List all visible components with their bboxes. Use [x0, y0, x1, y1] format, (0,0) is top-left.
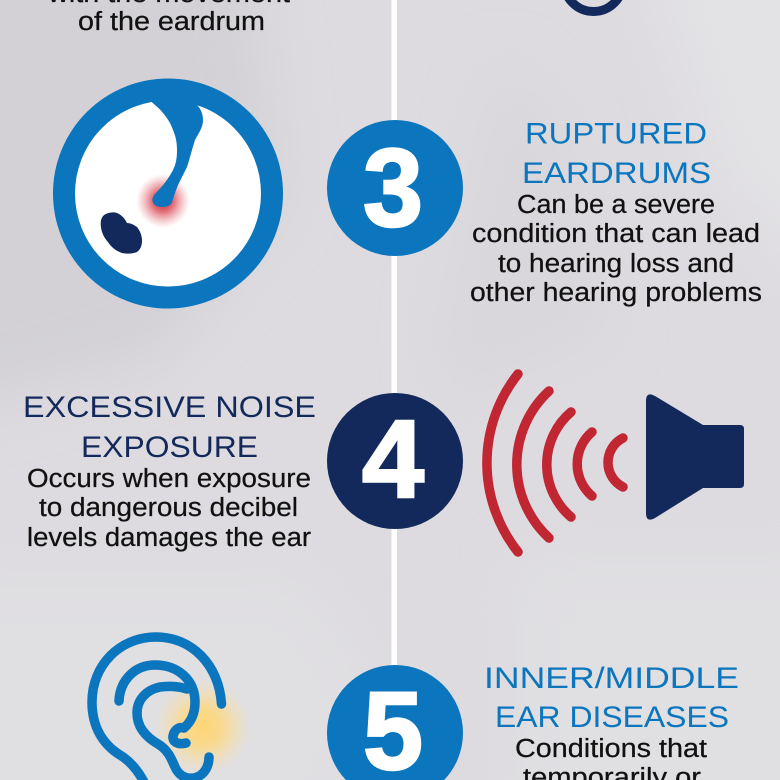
heading: inner/middle ear diseases [484, 662, 739, 734]
heading: ruptured eardrums: RUPTURED [525, 118, 707, 150]
text block: excessive noise exposure: levels damages the ear [27, 524, 312, 552]
heading: inner/middle ear diseases: INNER/MIDDLE [484, 662, 739, 695]
heading: ruptured eardrums: EARDRUMS [522, 157, 711, 190]
number badge 3 [327, 120, 463, 256]
icon: speaker with sound waves [487, 374, 744, 552]
heading: excessive noise exposure: EXPOSURE [81, 431, 258, 464]
heading: excessive noise exposure: EXCESSIVE NOISE [23, 391, 316, 424]
number badge 5 [327, 665, 463, 780]
text block: step 2 description: of the eardrum [78, 8, 265, 36]
text block: inner/middle ear diseases: Conditions that [515, 735, 707, 763]
text block: inner/middle ear diseases [484, 662, 739, 780]
number badge 3: 3 [363, 127, 423, 250]
sound waves [487, 374, 623, 552]
text block: excessive noise exposure [23, 391, 316, 552]
icon: ear with yellow glow [92, 637, 251, 780]
number badge 4: 4 [362, 398, 424, 521]
text block: ruptured eardrums: condition that can lead [472, 220, 760, 248]
heading: ruptured eardrums [522, 118, 711, 190]
heading: excessive noise exposure [23, 391, 316, 464]
icon: step 2 ring [564, 0, 623, 12]
text block: excessive noise exposure: Occurs when exposure [27, 465, 311, 493]
heading: inner/middle ear diseases: EAR DISEASES [495, 701, 729, 734]
text block: ruptured eardrums: Can be a severe [517, 191, 715, 219]
icon: ruptured eardrum [64, 90, 272, 298]
text block: ruptured eardrums [470, 118, 762, 307]
speaker [646, 394, 744, 520]
text block: ruptured eardrums: other hearing problems [470, 279, 762, 307]
text block: excessive noise exposure: to dangerous decibel [39, 494, 298, 522]
center timeline line [392, 0, 397, 780]
number badge 4 [327, 393, 463, 529]
text block: step 2 description [47, 0, 290, 36]
text block: ruptured eardrums: to hearing loss and [498, 250, 734, 278]
